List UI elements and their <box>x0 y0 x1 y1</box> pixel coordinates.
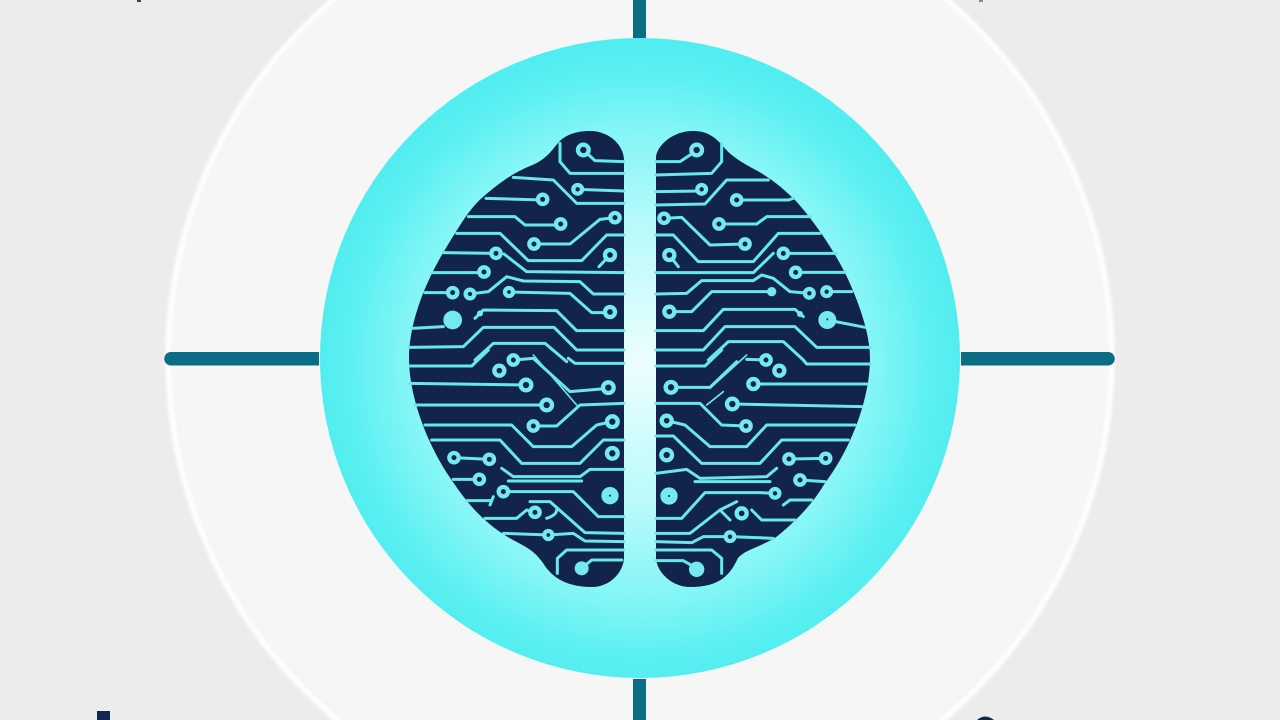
connector: top <box>633 0 646 38</box>
cropped icon fragment: top right <box>979 0 983 2</box>
cropped icon fragment: bottom left <box>97 711 110 720</box>
left upper circuit traces <box>409 143 624 362</box>
left hemisphere silhouette <box>409 131 624 587</box>
outer ring disc <box>168 0 1112 720</box>
brain: left hemisphere <box>409 131 624 587</box>
right hemisphere silhouette <box>656 131 870 587</box>
cropped icon fragment: bottom right <box>977 716 994 720</box>
right upper circuit traces <box>656 143 870 360</box>
left lower circuit traces <box>410 350 624 575</box>
cropped icon fragment: top left <box>137 0 141 2</box>
connector: bottom <box>633 679 646 720</box>
brain: right hemisphere <box>656 131 870 587</box>
connector: right <box>961 352 1115 366</box>
central glowing circle <box>320 38 960 678</box>
connector: left <box>164 352 319 366</box>
right lower circuit traces <box>656 350 870 577</box>
